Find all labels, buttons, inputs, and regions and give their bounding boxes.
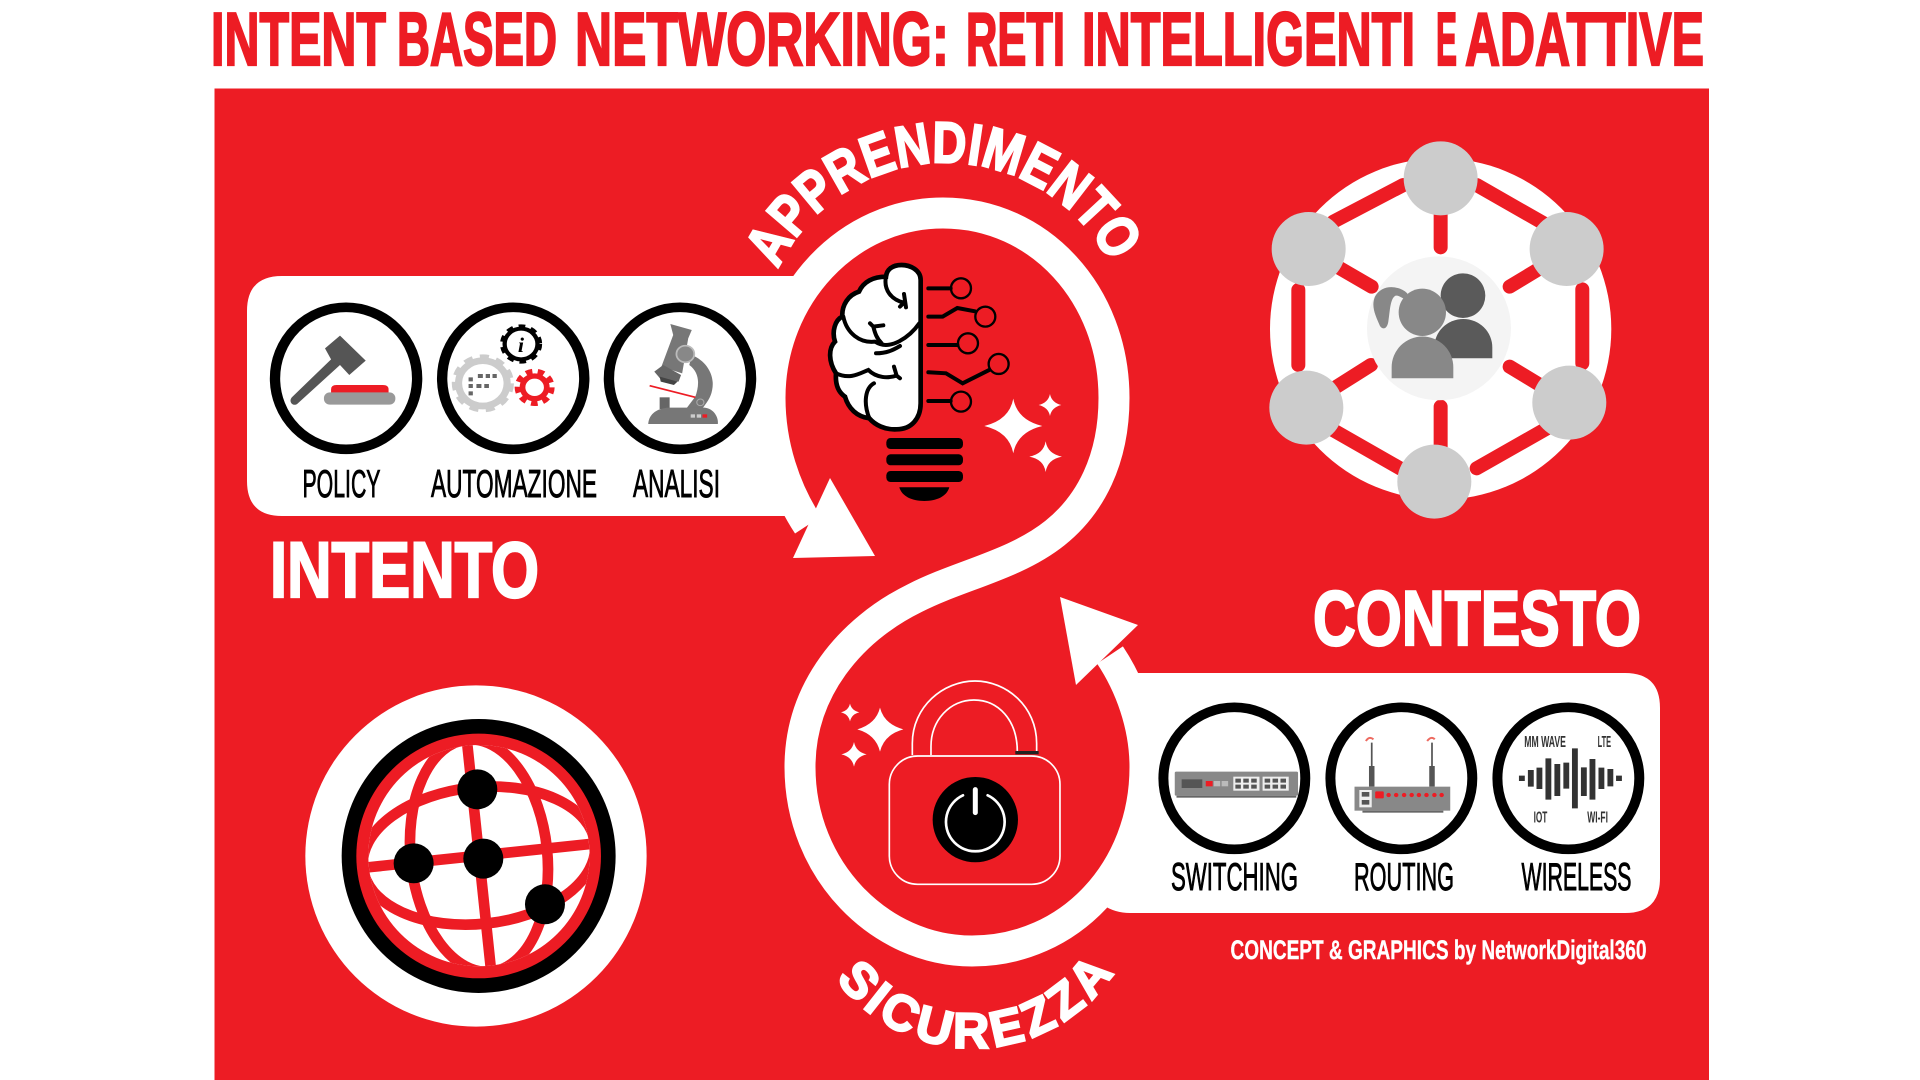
arrow: bottom flow [1060, 597, 1138, 685]
heading: intento: INTENTO [270, 525, 539, 614]
panel contents: contesto icons [1163, 707, 1639, 849]
credit line: CONCEPT & GRAPHICS by NetworkDigital360 [1230, 935, 1646, 965]
label: switching: SWITCHING [1171, 856, 1298, 899]
title [211, 0, 1704, 81]
label: wireless: WIRELESS [1522, 856, 1632, 899]
icon: switching [1163, 707, 1305, 849]
icon: wireless signal: IOT [1534, 809, 1547, 827]
panel: contesto white box [1075, 673, 1660, 913]
heading: sicurezza: SICUREZZA [840, 960, 1116, 1050]
icon: wireless signal: WI-FI [1587, 809, 1608, 827]
heading: apprendimento: APPRENDIMENTO [748, 121, 1139, 270]
icon: brain light bulb [830, 265, 1062, 501]
panel: intento white box [247, 276, 800, 516]
label: automazione: AUTOMAZIONE [431, 463, 597, 506]
icon: security padlock [841, 681, 1060, 884]
icon: policy gavel [275, 307, 417, 449]
infographic canvas [214, 10, 1709, 1080]
heading: contesto: CONTESTO [1313, 574, 1641, 662]
icon: routing [1330, 707, 1472, 849]
label: analisi: ANALISI [633, 463, 720, 506]
icon: wireless signal [1497, 707, 1639, 849]
icon: people network hexagon [1269, 141, 1611, 519]
icon: wireless signal: MM WAVE [1524, 733, 1566, 751]
red panel background [214, 88, 1709, 1080]
icon: analisi microscope [609, 307, 751, 449]
S-curve flow band [770, 213, 1145, 951]
icon: automazione gears: i [518, 334, 524, 357]
icon: wireless signal: LTE [1598, 733, 1611, 751]
arrow: top flow [793, 478, 875, 558]
label: routing: ROUTING [1354, 856, 1454, 899]
icon: automazione gears [442, 307, 584, 449]
panel contents: intento icons [275, 307, 751, 449]
label: policy: POLICY [302, 463, 380, 506]
icon: network globe [305, 685, 647, 1027]
